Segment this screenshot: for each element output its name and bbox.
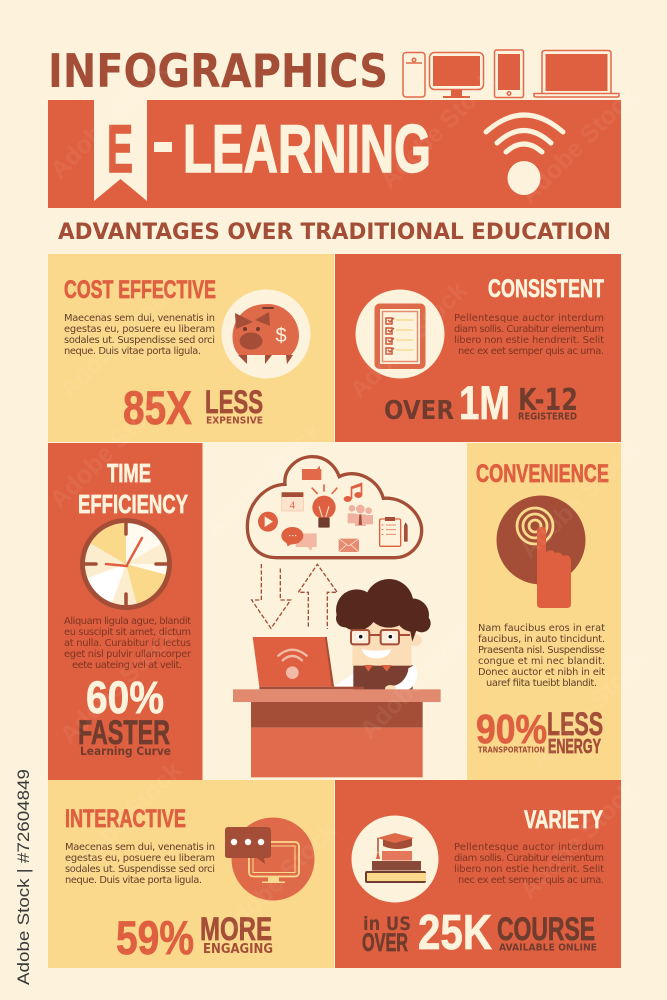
panel: convenience bbox=[467, 443, 621, 780]
heading: TIME bbox=[107, 458, 151, 488]
heading: CONSISTENT bbox=[488, 275, 604, 303]
icon: wifi bbox=[486, 115, 563, 195]
heading: COST EFFECTIVE bbox=[64, 276, 216, 304]
text block: neque. Duis vitae porta ligula. bbox=[65, 875, 202, 886]
text block bbox=[65, 842, 215, 886]
text block bbox=[478, 623, 605, 689]
laptop bbox=[253, 637, 364, 689]
text block: Maecenas sem dui, venenatis in bbox=[64, 313, 215, 324]
cloud with icons bbox=[247, 457, 422, 558]
icon: clipboard and pencil bbox=[380, 517, 408, 546]
stat: 90%: 90% bbox=[476, 706, 547, 752]
text block: egestas eu, posuere eu liberam bbox=[64, 324, 215, 335]
text block: Nam faucibus eros in erat bbox=[478, 623, 605, 634]
icon: light bulb bbox=[312, 484, 337, 528]
desk bbox=[233, 689, 441, 777]
icon: desktop monitor bbox=[430, 52, 484, 98]
stat label: less: LESS bbox=[205, 384, 263, 420]
text block bbox=[454, 842, 604, 886]
ribbon bookmark bbox=[94, 100, 147, 201]
icons: device row bbox=[403, 50, 619, 98]
panel: time efficiency bbox=[48, 443, 202, 780]
text block: libero non estie hendrerit. Selit bbox=[454, 335, 604, 346]
icon: phone bbox=[403, 52, 425, 97]
heading: VARIETY bbox=[524, 806, 603, 834]
text block bbox=[64, 616, 192, 671]
text: Adobe Stock bbox=[199, 416, 327, 544]
panel: consistent bbox=[335, 254, 621, 442]
heading line two: EFFICIENCY bbox=[78, 489, 188, 519]
text: Adobe Stock bbox=[59, 756, 187, 884]
text: Adobe Stock bbox=[54, 276, 182, 404]
subtitle: ADVANTAGES OVER TRADITIONAL EDUCATION bbox=[58, 220, 611, 245]
icon: clock bbox=[80, 518, 172, 610]
icon: touch gesture bbox=[496, 496, 586, 608]
stat label: over: OVER bbox=[384, 396, 454, 426]
stat label: in us: in US bbox=[363, 913, 411, 935]
stat label: transportation: TRANSPORTATION bbox=[478, 746, 545, 754]
icon: play button bbox=[258, 512, 278, 532]
text block: eget nisl pulvir ullamcorper bbox=[64, 649, 192, 660]
text block: Pellentesque auctor interdum bbox=[454, 313, 604, 324]
text block: eu suscipit sit amet, dictum bbox=[64, 627, 191, 638]
stat: 1m: 1M bbox=[459, 376, 510, 429]
text block: congue et mi nec blandit. bbox=[478, 656, 605, 667]
stat label: k-12: K-12 bbox=[518, 383, 578, 418]
icon: music note bbox=[344, 482, 362, 502]
stat: 60%: 60% bbox=[86, 672, 164, 723]
banner word learning: LEARNING bbox=[183, 111, 431, 187]
icon: people bbox=[348, 505, 373, 526]
text block: Donec auctor et nibh in eit bbox=[478, 667, 605, 678]
text block: Praesenta nisl. Suspendisse bbox=[478, 645, 605, 656]
text block: neque. Duis vitae porta ligula. bbox=[64, 346, 201, 357]
text: Adobe Stock bbox=[354, 616, 482, 744]
text block: sodales ut. Suspendisse sed orci bbox=[65, 864, 215, 875]
text: Adobe Stock bbox=[374, 66, 502, 194]
text block: faucibus, in auto tincidunt. bbox=[478, 634, 605, 645]
text: Adobe Stock bbox=[44, 56, 172, 184]
stock id vertical text: Adobe Stock | #72604849 bbox=[14, 769, 33, 985]
illustration: student at desk with cloud bbox=[233, 457, 441, 777]
icon: monitor with chat bbox=[225, 818, 314, 900]
text block: libero non estie hendrerit. Selit bbox=[454, 864, 604, 875]
text: Adobe Stock bbox=[214, 816, 342, 944]
banner: e-learning bbox=[48, 100, 621, 208]
text: Adobe Stock bbox=[514, 81, 642, 209]
icon: tablet bbox=[494, 50, 524, 98]
icon: books and graduation cap bbox=[352, 816, 438, 902]
text block: diam sollis. Curabitur elementum bbox=[454, 324, 604, 335]
stat label: engaging: ENGAGING bbox=[203, 942, 273, 957]
stat label: over: OVER bbox=[362, 929, 408, 957]
text block: nec ex eet semper quis ac urna. bbox=[458, 346, 604, 357]
stat label: energy: ENERGY bbox=[548, 736, 601, 758]
icon: checklist tablet bbox=[356, 290, 444, 378]
banner dash bbox=[154, 142, 172, 152]
icon: laptop bbox=[534, 50, 619, 97]
icon: piggy bank bbox=[222, 290, 310, 378]
stat label: learning curve: Learning Curve bbox=[80, 744, 171, 758]
stat label: available online: AVAILABLE ONLINE bbox=[499, 942, 597, 954]
text: Adobe Stock bbox=[514, 436, 642, 564]
person bbox=[335, 579, 431, 692]
icon: calendar: 4 bbox=[290, 500, 296, 511]
stat label: less: LESS bbox=[547, 706, 603, 742]
panel: interactive bbox=[48, 780, 334, 968]
text block bbox=[64, 313, 215, 357]
text block: Aliquam ligula ague, blandit bbox=[64, 616, 191, 627]
heading: CONVENIENCE bbox=[476, 460, 609, 488]
text: Adobe Stock bbox=[524, 646, 652, 774]
text block: Pellentesque auctor interdum bbox=[454, 842, 604, 853]
text: Adobe Stock bbox=[514, 776, 642, 904]
text block: Maecenas sem dui, venenatis in bbox=[65, 842, 215, 853]
text block: uaref fiita tueibt blandit. bbox=[486, 678, 597, 689]
text block: eete uateing vel at velit. bbox=[72, 660, 182, 671]
panel: cost effective bbox=[48, 254, 334, 442]
text block: sodales ut. Suspendisse sed orci bbox=[64, 335, 215, 346]
text block: nec ex eet semper quis ac urna. bbox=[458, 875, 604, 886]
icon: envelope bbox=[339, 539, 359, 552]
icon: calendar bbox=[282, 492, 303, 511]
text: Adobe Stock bbox=[54, 621, 182, 749]
icon: chat bubbles bbox=[281, 527, 317, 551]
text: Adobe Stock bbox=[344, 276, 472, 404]
icon: piggy bank: $ bbox=[275, 325, 287, 347]
stat label: expensive: EXPENSIVE bbox=[206, 416, 263, 426]
stat: 25k: 25K bbox=[418, 906, 492, 960]
panel: variety bbox=[335, 780, 621, 968]
heading: INTERACTIVE bbox=[65, 805, 186, 833]
banner letter E: E bbox=[107, 111, 133, 187]
text block bbox=[454, 313, 604, 357]
icon: folder bbox=[302, 466, 321, 480]
text block: at nulla. Curabitur id lectus bbox=[64, 638, 191, 649]
stat label: faster: FASTER bbox=[78, 714, 170, 752]
text block: diam sollis. Curabitur elementum bbox=[454, 853, 604, 864]
arrow: upload bbox=[298, 564, 337, 629]
stat label: registered: REGISTERED bbox=[518, 412, 577, 422]
stat: 59%: 59% bbox=[116, 911, 194, 964]
stat label: course: COURSE bbox=[497, 911, 595, 947]
stat: 85x: 85X bbox=[123, 381, 192, 434]
arrow: download bbox=[252, 564, 291, 628]
stat label: more: MORE bbox=[200, 911, 272, 947]
text: Adobe Stock bbox=[44, 386, 172, 514]
title: infographics: INFOGRAPHICS bbox=[48, 44, 388, 98]
text block: egestas eu, posuere eu liberam bbox=[65, 853, 215, 864]
